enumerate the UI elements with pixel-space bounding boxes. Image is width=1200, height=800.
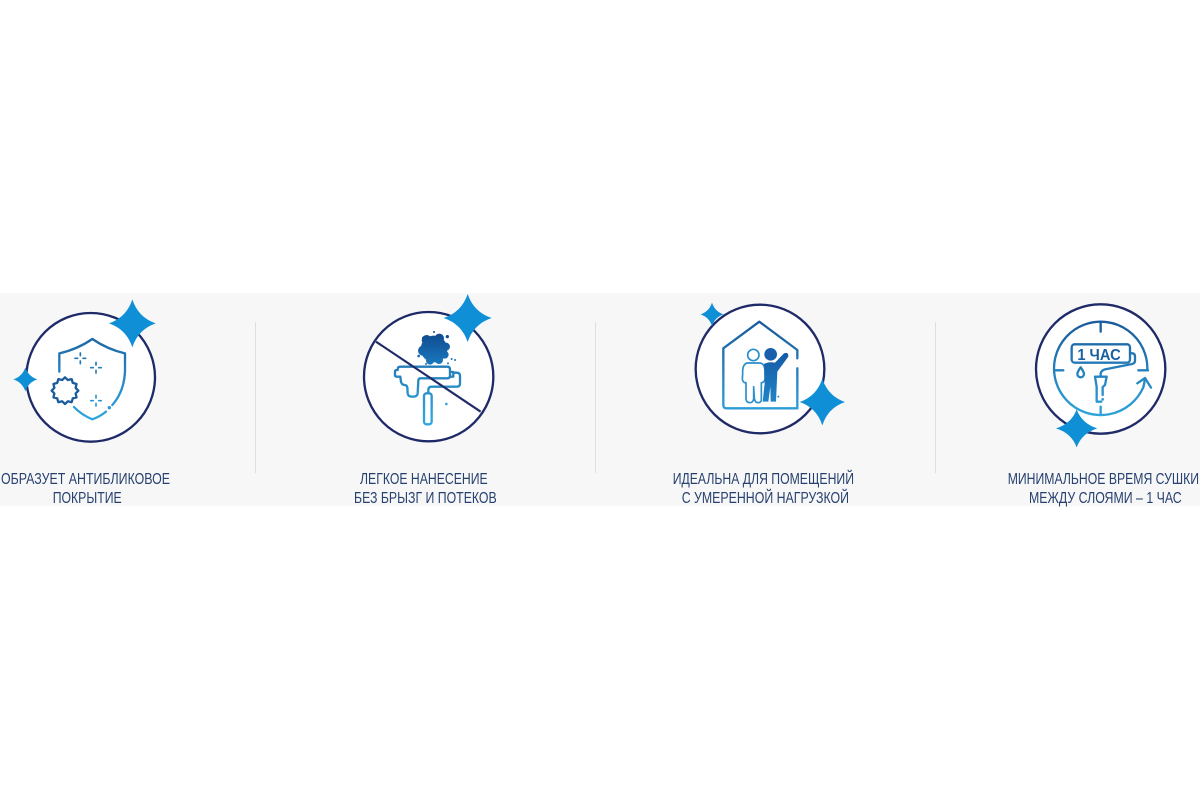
icon: clock with roller: 1 ЧАС bbox=[1077, 347, 1121, 364]
panel: moderate traffic rooms bbox=[673, 303, 854, 507]
caption bbox=[1, 471, 170, 507]
icon: clock with roller bbox=[1036, 304, 1165, 447]
icon: shield with sparkles bbox=[13, 299, 156, 442]
divider 3 bbox=[935, 322, 936, 473]
panel: easy application bbox=[354, 294, 497, 507]
divider 2 bbox=[595, 322, 596, 473]
background band bbox=[0, 293, 1200, 506]
divider 1 bbox=[255, 322, 256, 473]
panel: one hour drying time bbox=[1008, 304, 1199, 507]
caption: ПОКРЫТИЕ bbox=[53, 490, 122, 507]
panel: anti-glare coating bbox=[1, 299, 170, 507]
caption: С УМЕРЕННОЙ НАГРУЗКОЙ bbox=[682, 488, 849, 507]
caption: ОБРАЗУЕТ АНТИБЛИКОВОЕ bbox=[1, 471, 170, 488]
icon: house with two people bbox=[696, 303, 845, 433]
caption: ЛЕГКОЕ НАНЕСЕНИЕ bbox=[360, 471, 488, 488]
caption bbox=[673, 469, 854, 507]
caption: ИДЕАЛЬНА ДЛЯ ПОМЕЩЕНИЙ bbox=[673, 469, 854, 488]
caption bbox=[1008, 471, 1199, 507]
caption: БЕЗ БРЫЗГ И ПОТЕКОВ bbox=[354, 490, 497, 507]
caption bbox=[354, 471, 497, 507]
icon: crossed-out paint roller bbox=[364, 294, 493, 441]
